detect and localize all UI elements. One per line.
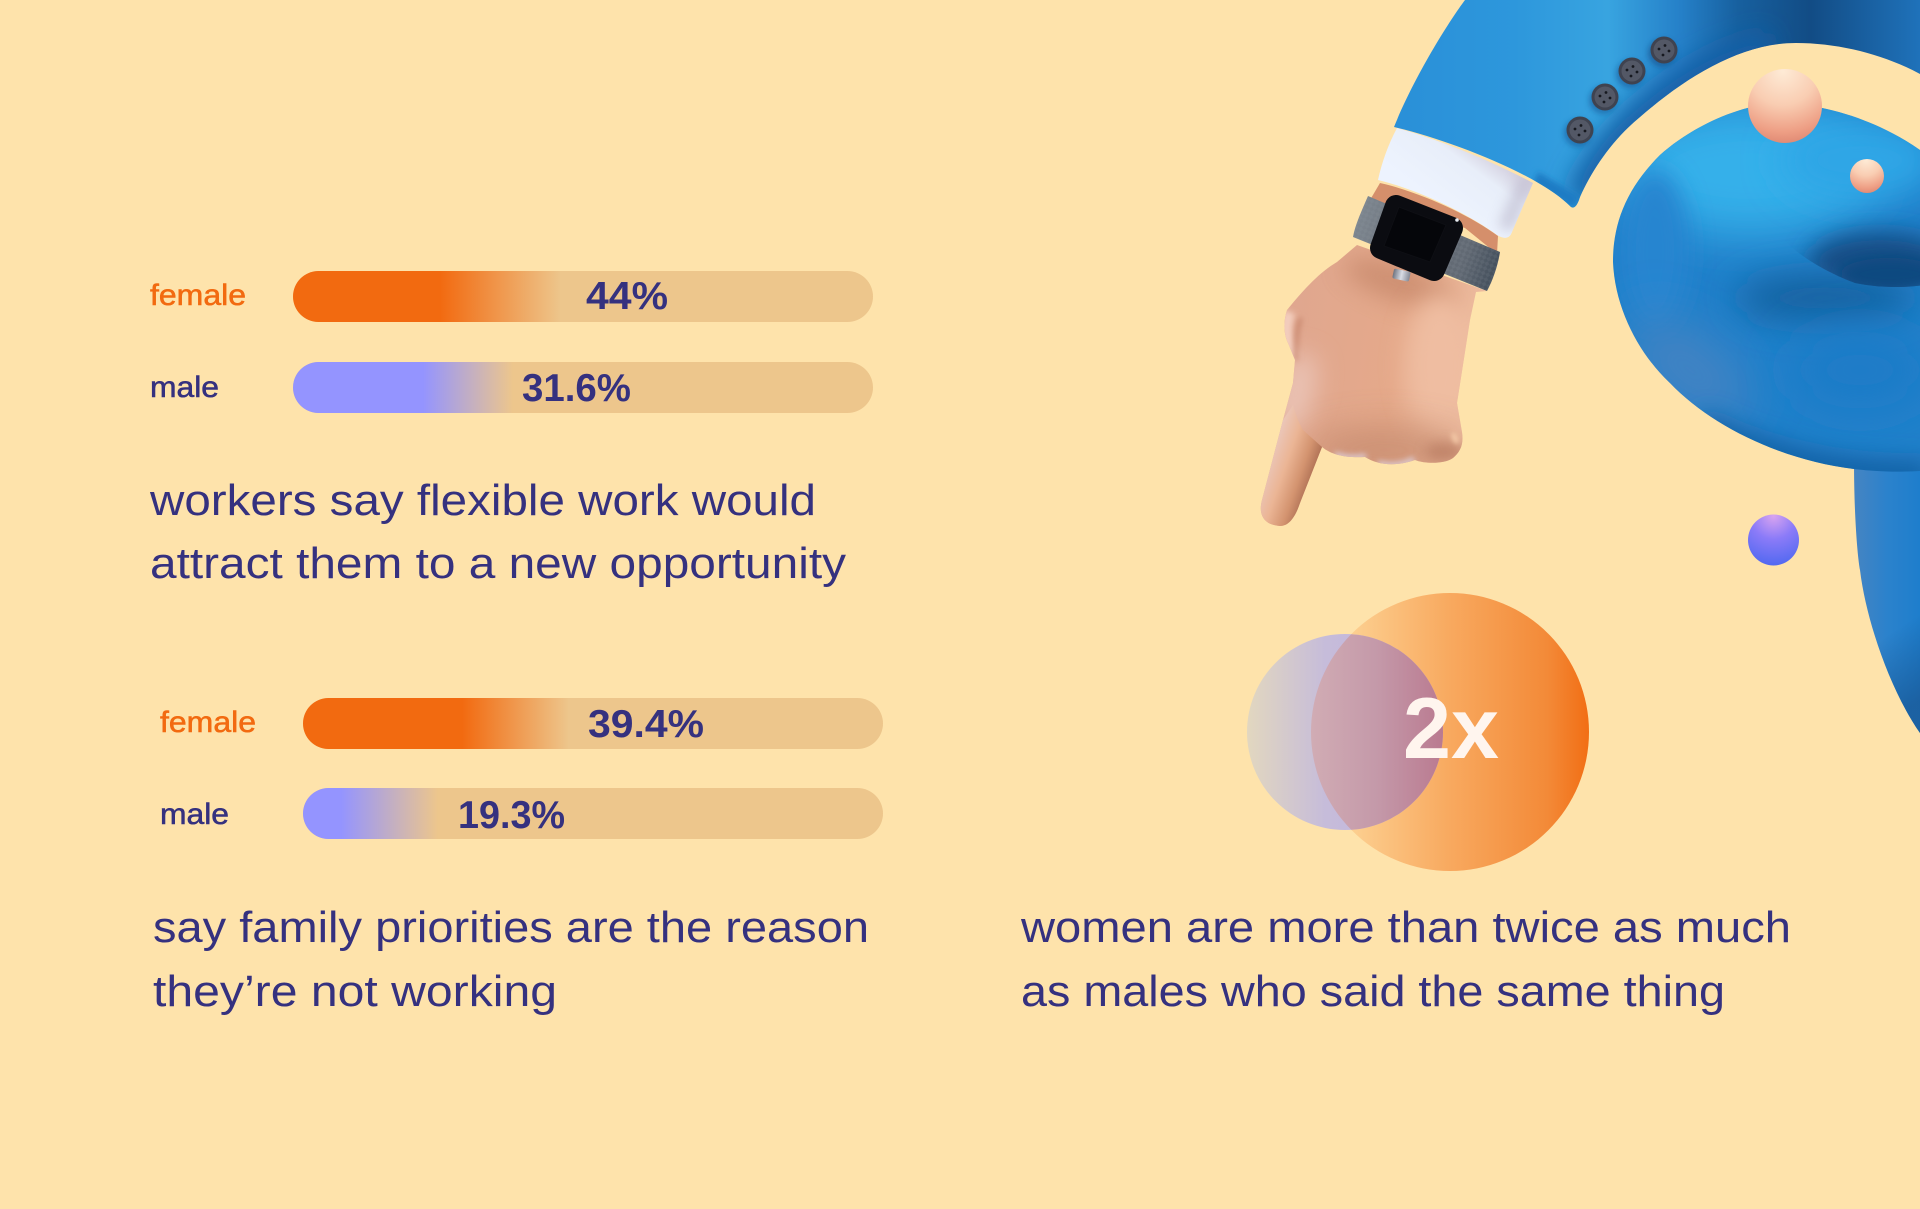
illustration: blue blob: [1613, 103, 1920, 474]
hand silhouette: [1261, 245, 1487, 526]
text: family priorities caption: they’re not working: [153, 967, 557, 1016]
label: female: female: [160, 706, 256, 739]
icon: sleeve buttons: [1564, 36, 1678, 147]
panel: flexible work comparison: [149, 271, 873, 588]
watch screen: [1384, 207, 1446, 262]
bar: male 19.3%: [303, 788, 883, 839]
sphere: small peach: [1850, 159, 1884, 193]
illustration: shirt cuff: [1378, 128, 1533, 238]
illustration: blue tube lower section: [1854, 460, 1920, 733]
circle: female orange: [1311, 593, 1589, 871]
text: twice as much caption: as males who said the same thing: [1021, 967, 1725, 1016]
value: 2x: 2x: [1403, 681, 1499, 777]
bar: male 31.6%: 31.6%: [522, 367, 631, 410]
sphere: large peach: [1748, 69, 1822, 143]
text: twice as much caption: women are more than twice as much: [1020, 903, 1791, 952]
bar: male 19.3%: 19.3%: [458, 794, 565, 837]
watch strap: [1353, 196, 1500, 291]
label: female: female: [150, 279, 246, 312]
watch glint: [1455, 218, 1459, 222]
wrist above the strap: [1370, 183, 1498, 254]
index finger: [1261, 405, 1322, 526]
bar: male 31.6%: [293, 362, 873, 413]
bar: female 44%: [293, 271, 873, 322]
label: male: male: [160, 798, 229, 831]
illustration: pointing hand: [1261, 183, 1498, 526]
watch case: [1381, 206, 1452, 270]
chart: overlapping circles 2x: [1247, 593, 1589, 871]
infographic canvas: [150, 0, 1920, 1015]
panel: family priorities comparison: [153, 698, 883, 1016]
text: flexible work caption: attract them to a new opportunity: [150, 539, 846, 588]
sphere: purple: [1748, 514, 1799, 566]
label: male: male: [150, 371, 219, 404]
circle: male purple: [1247, 634, 1443, 830]
bar: female 44%: 44%: [586, 275, 668, 318]
watch crown: [1392, 268, 1411, 282]
illustration: sleeve: [1394, 0, 1920, 208]
thumb nail: [1450, 431, 1460, 445]
bar: female 39.4%: [303, 698, 883, 749]
illustration: smartwatch: [1353, 196, 1500, 291]
circle overlap: [1311, 634, 1443, 830]
bar: female 39.4%: 39.4%: [588, 703, 704, 746]
text: family priorities caption: say family priorities are the reason: [153, 903, 869, 952]
text: flexible work caption: workers say flexible work would: [149, 476, 816, 525]
